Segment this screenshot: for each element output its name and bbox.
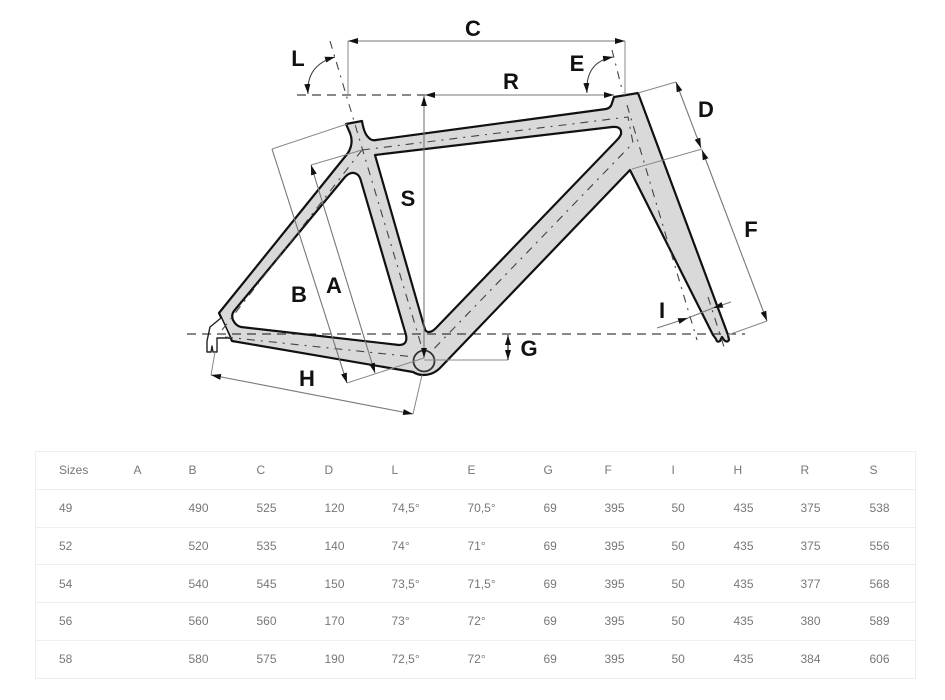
label C: C xyxy=(465,16,481,41)
row: size 56: 560 xyxy=(256,614,277,628)
label L: L xyxy=(291,46,305,71)
row: size 58: 575 xyxy=(256,652,277,666)
row: size 58: 384 xyxy=(800,652,821,666)
header row: S xyxy=(870,463,878,477)
row: size 49: 69 xyxy=(544,501,557,515)
dimension R xyxy=(425,94,614,96)
row: size 56: 560 xyxy=(188,614,209,628)
row: size 49: 74,5° xyxy=(392,501,420,515)
row: size 52: 50 xyxy=(672,539,685,553)
header row: G xyxy=(544,463,553,477)
row: size 52: 395 xyxy=(604,539,625,553)
extension lines xyxy=(211,41,767,414)
dimension D xyxy=(676,82,701,148)
rear dropout xyxy=(207,318,230,352)
label G: G xyxy=(520,336,538,361)
dimension S xyxy=(423,96,425,358)
angle L arc xyxy=(308,57,335,94)
row: size 56: 170 xyxy=(324,614,345,628)
row: size 54: 540 xyxy=(188,577,209,591)
row: size 58: 72,5° xyxy=(392,652,420,666)
row: size 49: 120 xyxy=(324,501,345,515)
header row: D xyxy=(324,463,333,477)
row: size 49: 538 xyxy=(870,501,890,515)
row: size 56 xyxy=(59,614,890,628)
row: size 49 xyxy=(59,501,890,515)
dimension I xyxy=(657,302,731,328)
row: size 49: 50 xyxy=(672,501,685,515)
row: size 54: 568 xyxy=(870,577,890,591)
bottom bracket circle xyxy=(414,350,434,372)
row: size 52: 74° xyxy=(392,539,410,553)
angle E arc xyxy=(587,57,613,93)
dimension G xyxy=(507,335,509,360)
horizontal reference lines xyxy=(187,95,745,334)
dimension A xyxy=(311,165,375,373)
label F: F xyxy=(744,217,758,242)
dimension C xyxy=(348,40,625,42)
header row: F xyxy=(604,463,612,477)
row: size 52: 535 xyxy=(256,539,277,553)
row: size 49: 395 xyxy=(604,501,625,515)
row: size 56: 72° xyxy=(468,614,486,628)
header row: E xyxy=(468,463,476,477)
row: size 54: 395 xyxy=(604,577,625,591)
row: size 49: 70,5° xyxy=(468,501,496,515)
row: size 56: 73° xyxy=(392,614,410,628)
header row: H xyxy=(734,463,742,477)
row: size 49: 435 xyxy=(734,501,754,515)
row: size 52: 375 xyxy=(800,539,821,553)
row: size 54: 545 xyxy=(256,577,277,591)
row: size 52 xyxy=(59,539,890,553)
header row: B xyxy=(188,463,197,477)
frame silhouette with main triangles xyxy=(219,93,729,375)
header row: A xyxy=(134,463,142,477)
row: size 52: 435 xyxy=(734,539,754,553)
header row: R xyxy=(800,463,809,477)
row: size 54: 69 xyxy=(544,577,557,591)
row: size 49: 375 xyxy=(800,501,821,515)
dimension B xyxy=(272,149,347,383)
row: size 58: 190 xyxy=(324,652,345,666)
row: size 54: 377 xyxy=(800,577,821,591)
dimension H xyxy=(211,375,413,414)
row: size 58 xyxy=(59,652,890,666)
row: size 54: 435 xyxy=(734,577,754,591)
header row: C xyxy=(256,463,265,477)
label I: I xyxy=(659,298,665,323)
header row: Sizes xyxy=(59,463,88,477)
row: size 49: 49 xyxy=(59,501,72,515)
row: size 56: 395 xyxy=(604,614,625,628)
row: size 52: 71° xyxy=(468,539,486,553)
row: size 58: 435 xyxy=(734,652,754,666)
header row: I xyxy=(672,463,675,477)
row: size 56: 435 xyxy=(734,614,754,628)
row: size 58: 58 xyxy=(59,652,72,666)
bicycle frame geometry diagram xyxy=(187,16,768,415)
label B: B xyxy=(291,282,307,307)
row: size 52: 140 xyxy=(324,539,345,553)
row: size 54 xyxy=(59,577,890,591)
row: size 56: 380 xyxy=(800,614,821,628)
label H: H xyxy=(299,366,315,391)
label R: R xyxy=(503,69,519,94)
label D: D xyxy=(698,97,714,122)
row: size 58: 395 xyxy=(604,652,625,666)
header row: L xyxy=(392,463,398,477)
row: size 58: 606 xyxy=(870,652,890,666)
header row xyxy=(59,463,890,666)
label S: S xyxy=(401,186,415,211)
row: size 52: 69 xyxy=(544,539,557,553)
row: size 58: 72° xyxy=(468,652,486,666)
row: size 54: 50 xyxy=(672,577,685,591)
row: size 56: 50 xyxy=(672,614,685,628)
row: size 54: 54 xyxy=(59,577,72,591)
row: size 54: 71,5° xyxy=(468,577,496,591)
row: size 56: 589 xyxy=(870,614,890,628)
row: size 56: 56 xyxy=(59,614,72,628)
row: size 54: 73,5° xyxy=(392,577,420,591)
row: size 58: 50 xyxy=(672,652,685,666)
label A: A xyxy=(326,273,342,298)
row: size 58: 69 xyxy=(544,652,557,666)
row: size 58: 580 xyxy=(188,652,209,666)
row: size 52: 556 xyxy=(870,539,890,553)
label E: E xyxy=(570,51,584,76)
row: size 54: 150 xyxy=(324,577,345,591)
dimension F xyxy=(702,150,767,321)
size geometry table xyxy=(35,451,916,679)
row: size 49: 525 xyxy=(256,501,277,515)
row: size 49: 490 xyxy=(188,501,209,515)
row: size 52: 52 xyxy=(59,539,72,553)
row: size 56: 69 xyxy=(544,614,557,628)
row: size 52: 520 xyxy=(188,539,209,553)
frame centre lines xyxy=(222,41,725,358)
